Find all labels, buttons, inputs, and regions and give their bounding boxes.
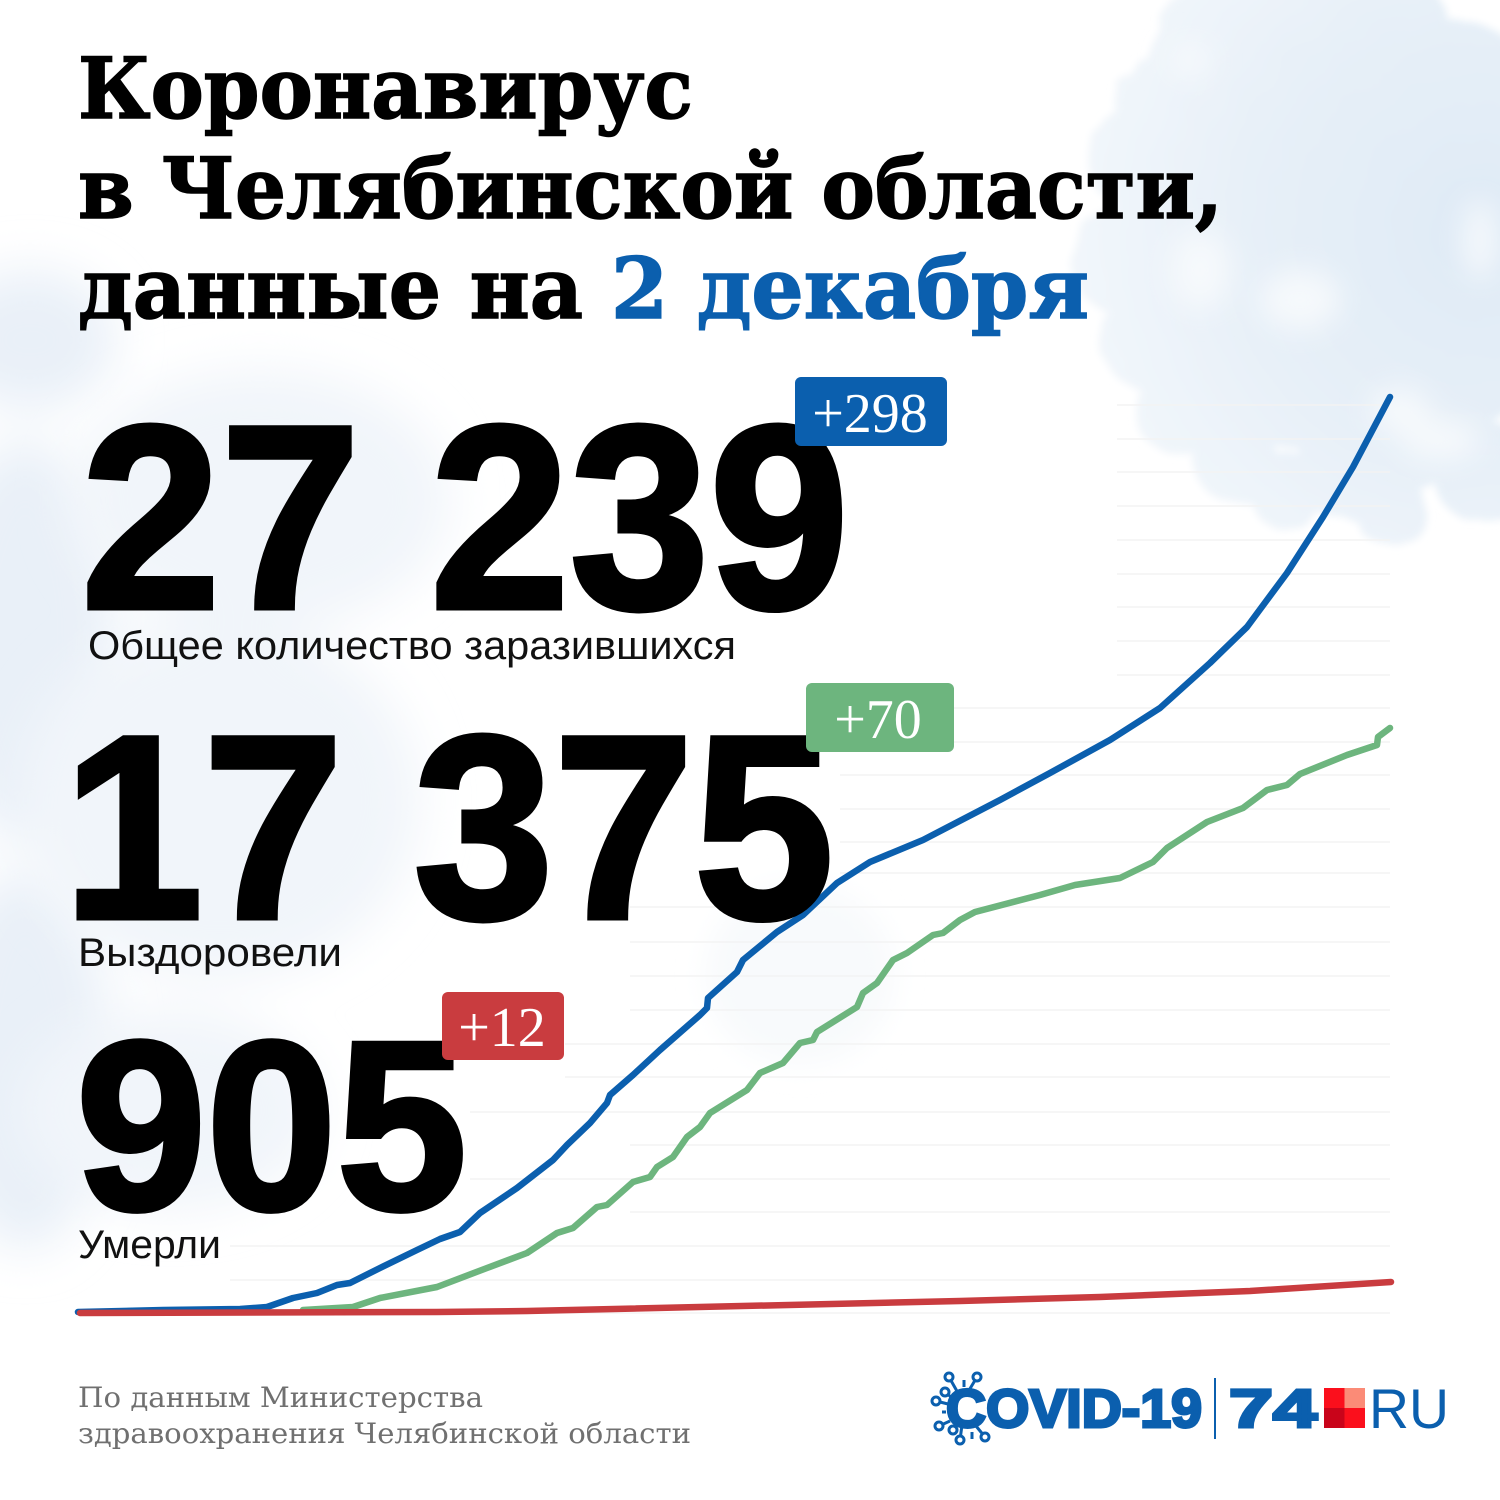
stat: deaths: Умерли bbox=[78, 1223, 221, 1267]
icon: red squares bbox=[1324, 1388, 1365, 1428]
line: total infected bbox=[78, 397, 1390, 1312]
stat: recovered: Выздоровели bbox=[78, 931, 342, 975]
stat: deaths: 905 bbox=[76, 992, 467, 1261]
title: данные на bbox=[78, 239, 583, 338]
source note bbox=[78, 1381, 691, 1450]
title: Коронавирус bbox=[78, 39, 693, 138]
stat: total infected: 27 239 bbox=[81, 371, 849, 664]
title: в Челябинской области, bbox=[78, 139, 1223, 238]
source note: здравоохранения Челябинской области bbox=[78, 1417, 691, 1450]
title bbox=[78, 39, 1223, 338]
line: recovered bbox=[303, 728, 1390, 1310]
badge: +298: +298 bbox=[812, 383, 928, 445]
line: deaths bbox=[80, 1282, 1391, 1313]
stat: recovered: 17 375 bbox=[63, 681, 834, 974]
logo: COVID-19 74.RU: COVID-19 bbox=[946, 1379, 1202, 1439]
badge: +298 bbox=[795, 377, 947, 446]
logo: COVID-19 74.RU bbox=[932, 1373, 1449, 1444]
source note: По данным Министерства bbox=[78, 1381, 483, 1414]
line chart bbox=[78, 397, 1391, 1313]
logo: COVID-19 74.RU: 74 bbox=[1229, 1379, 1317, 1439]
badge: +70: +70 bbox=[834, 689, 922, 751]
chart grid lines bbox=[78, 405, 1390, 1313]
icon: virus bbox=[932, 1373, 989, 1444]
stat: total infected: Общее количество заразившихся bbox=[88, 624, 736, 668]
badge: +12 bbox=[442, 992, 564, 1060]
badge: +12: +12 bbox=[458, 997, 546, 1059]
logo: COVID-19 74.RU: RU bbox=[1369, 1377, 1449, 1440]
title: 2 декабря bbox=[611, 239, 1089, 338]
badge: +70 bbox=[806, 683, 954, 752]
